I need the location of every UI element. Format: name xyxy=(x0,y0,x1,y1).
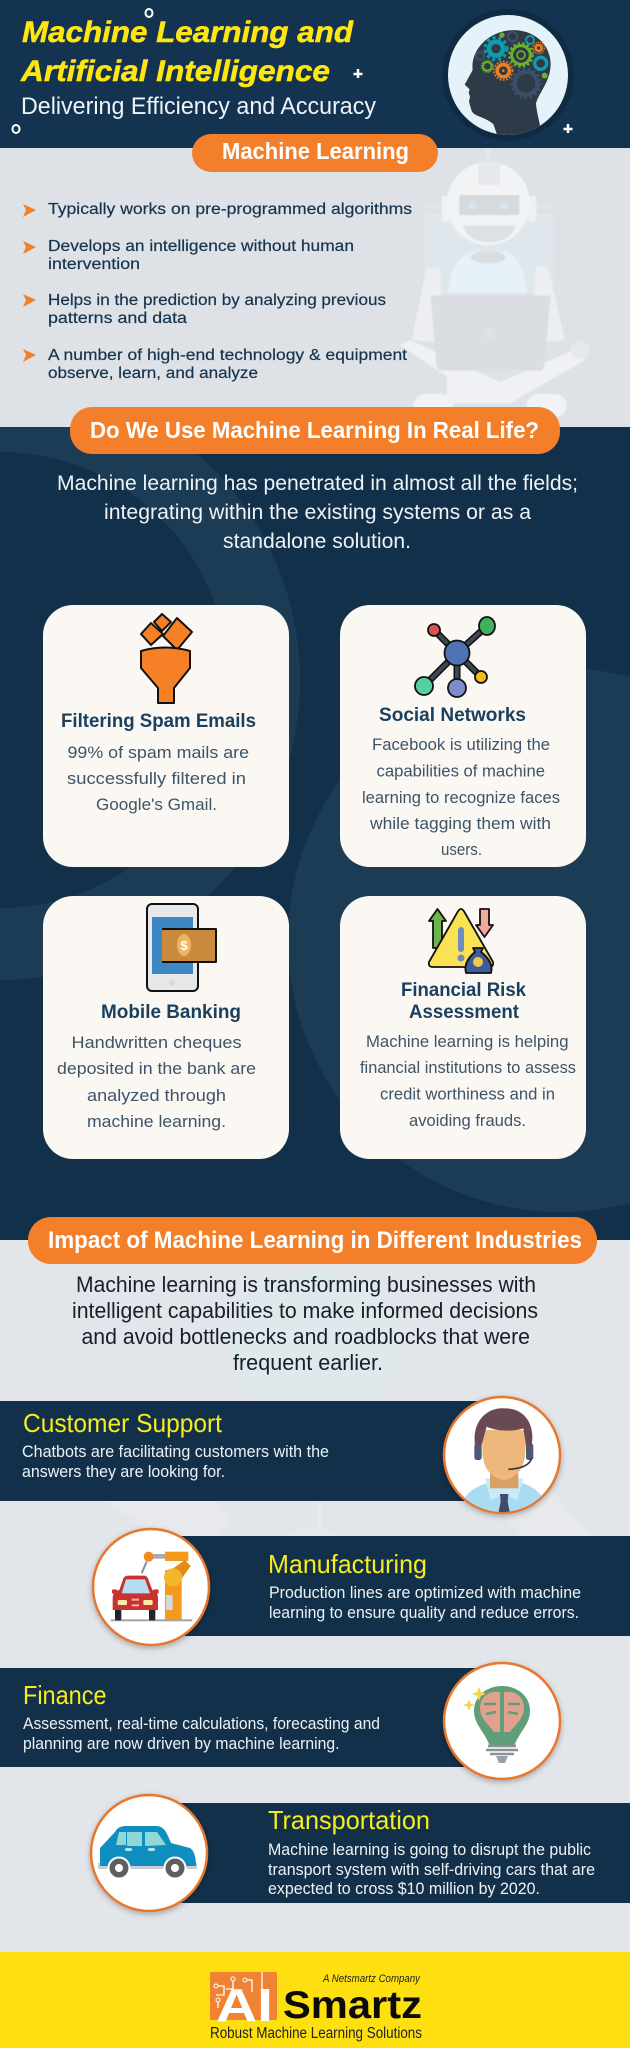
heading: Customer Support xyxy=(23,1408,223,1438)
intro paragraph: real life: Machine learning has penetrated in almost all the fields; xyxy=(57,471,578,495)
icon: support agent xyxy=(444,1397,560,1517)
body text xyxy=(23,1715,380,1753)
bullet text 3 xyxy=(48,292,386,327)
icon: bullet arrow xyxy=(23,349,36,362)
bullet text 2: intervention xyxy=(48,256,140,273)
icon: funnel with envelopes xyxy=(141,614,192,703)
section background: industries xyxy=(0,1240,630,1952)
panel: finance xyxy=(0,1663,560,1779)
card text: Google's Gmail. xyxy=(96,795,217,814)
icon: bullet arrow xyxy=(23,204,36,217)
panel: transportation xyxy=(91,1795,630,1911)
section background: header xyxy=(0,0,630,148)
bullet text 4: A number of high-end technology & equipment xyxy=(48,347,408,364)
section background: real life xyxy=(0,416,630,1240)
heading: machine learning pill: Machine Learning xyxy=(222,138,409,164)
icon: brain light bulb xyxy=(444,1663,560,1779)
intro paragraph: industries: intelligent capabilities to make informed decisions xyxy=(72,1298,538,1323)
card text: successfully filtered in xyxy=(67,769,246,788)
illustration: faded robot xyxy=(400,148,589,417)
body text: Chatbots are facilitating customers with the xyxy=(22,1443,329,1461)
title: Artificial Intelligence xyxy=(20,55,330,88)
bullet text 4: observe, learn, and analyze xyxy=(48,365,258,382)
icon: phone with banknote xyxy=(147,904,217,991)
title: Machine Learning and xyxy=(22,16,354,49)
intro paragraph: industries: and avoid bottlenecks and roadblocks that were xyxy=(82,1324,530,1349)
heading: real life pill: Do We Use Machine Learning In Real Life? xyxy=(90,417,539,443)
intro paragraph: real life: integrating within the existing systems or as a xyxy=(104,500,531,524)
card text: financial institutions to assess xyxy=(360,1058,576,1077)
body text: transport system with self-driving cars that are xyxy=(268,1861,595,1879)
heading: impact pill: Impact of Machine Learning in Different Industries xyxy=(48,1227,582,1254)
list: machine learning points xyxy=(23,201,412,382)
heading: real life pill xyxy=(70,407,560,454)
intro paragraph: industries: Machine learning is transforming businesses with xyxy=(76,1272,536,1297)
card heading: Assessment xyxy=(409,1002,520,1023)
logo wordmark: Smartz xyxy=(283,1984,422,2027)
card text: deposited in the bank are xyxy=(57,1059,256,1078)
body text: expected to cross $10 million by 2020. xyxy=(268,1880,540,1898)
body text: learning to ensure quality and reduce errors. xyxy=(269,1604,579,1622)
card heading: Mobile Banking xyxy=(101,1002,241,1023)
heading: impact pill xyxy=(28,1217,597,1264)
icon: bullet arrow xyxy=(23,241,36,254)
card heading: Financial Risk xyxy=(401,980,526,1001)
body text: Assessment, real-time calculations, forecasting and xyxy=(23,1715,380,1733)
card text: capabilities of machine xyxy=(376,762,545,780)
card text xyxy=(57,1033,256,1131)
card: social networks xyxy=(340,605,586,867)
icon: robot arm painting car xyxy=(93,1529,209,1645)
card text: Facebook is utilizing the xyxy=(372,735,550,754)
card text xyxy=(67,743,249,814)
card text: Handwritten cheques xyxy=(72,1033,242,1052)
card heading: Filtering Spam Emails xyxy=(61,711,256,732)
card text: avoiding frauds. xyxy=(409,1111,526,1130)
gears xyxy=(487,39,505,58)
title xyxy=(20,16,354,88)
icon: warning triangle with arrows and money bag xyxy=(429,909,493,973)
subtitle: Delivering Efficiency and Accuracy xyxy=(21,93,376,120)
body text xyxy=(269,1584,581,1622)
body text: Production lines are optimized with machine xyxy=(269,1584,581,1602)
logo mark: AI xyxy=(216,1979,273,2031)
bullet text 1: Typically works on pre-programmed algorithms xyxy=(48,201,412,218)
body text xyxy=(268,1841,595,1898)
tagline: Robust Machine Learning Solutions xyxy=(210,2025,422,2042)
card text: Machine learning is helping xyxy=(366,1032,568,1051)
body text: planning are now driven by machine learning. xyxy=(23,1735,340,1753)
body text xyxy=(22,1443,329,1481)
panel: customer support xyxy=(0,1397,560,1517)
bullet text 2 xyxy=(48,238,354,273)
logo mark xyxy=(210,1972,277,2031)
heading: Finance xyxy=(23,1680,106,1710)
icon: network xyxy=(415,617,495,697)
company note: A Netsmartz Company xyxy=(322,1973,421,1985)
intro paragraph: real life xyxy=(57,471,578,553)
section background: footer xyxy=(0,1952,630,2048)
heading: machine learning pill xyxy=(192,134,438,172)
card text: 99% of spam mails are xyxy=(68,743,249,762)
card text: learning to recognize faces xyxy=(362,788,560,807)
card: financial risk assessment xyxy=(340,896,586,1159)
card: filtering spam emails xyxy=(43,605,289,867)
body text: Machine learning is going to disrupt the public xyxy=(268,1841,591,1859)
card: mobile banking xyxy=(43,896,289,1159)
footer logo xyxy=(210,1972,422,2042)
heading: Transportation xyxy=(268,1805,430,1835)
bullet text 3: Helps in the prediction by analyzing previous xyxy=(48,292,386,309)
icon: phone with banknote: $ xyxy=(180,938,188,953)
bullet text 3: patterns and data xyxy=(48,310,187,327)
icon: head with gears xyxy=(442,9,574,141)
icon: bullet arrow xyxy=(23,294,36,307)
card text: users. xyxy=(441,840,482,859)
icon: blue car xyxy=(91,1795,207,1911)
card text xyxy=(362,735,560,859)
decorative marks xyxy=(12,9,572,133)
card text: while tagging them with xyxy=(369,814,551,833)
intro paragraph: real life: standalone solution. xyxy=(223,529,411,553)
intro paragraph: industries: frequent earlier. xyxy=(233,1350,383,1375)
section background: machine learning xyxy=(0,148,630,427)
card heading: Social Networks xyxy=(379,705,526,726)
panel: manufacturing xyxy=(93,1529,630,1645)
card text: machine learning. xyxy=(87,1112,226,1131)
card text: analyzed through xyxy=(87,1086,226,1105)
body text: answers they are looking for. xyxy=(22,1463,225,1481)
bullet text 2: Develops an intelligence without human xyxy=(48,238,354,255)
card text xyxy=(360,1032,576,1130)
card heading xyxy=(401,980,526,1023)
bullet text 4 xyxy=(48,347,408,382)
card text: credit worthiness and in xyxy=(380,1084,555,1104)
intro paragraph: industries xyxy=(72,1272,538,1375)
heading: Manufacturing xyxy=(268,1549,427,1579)
header block xyxy=(12,9,574,141)
